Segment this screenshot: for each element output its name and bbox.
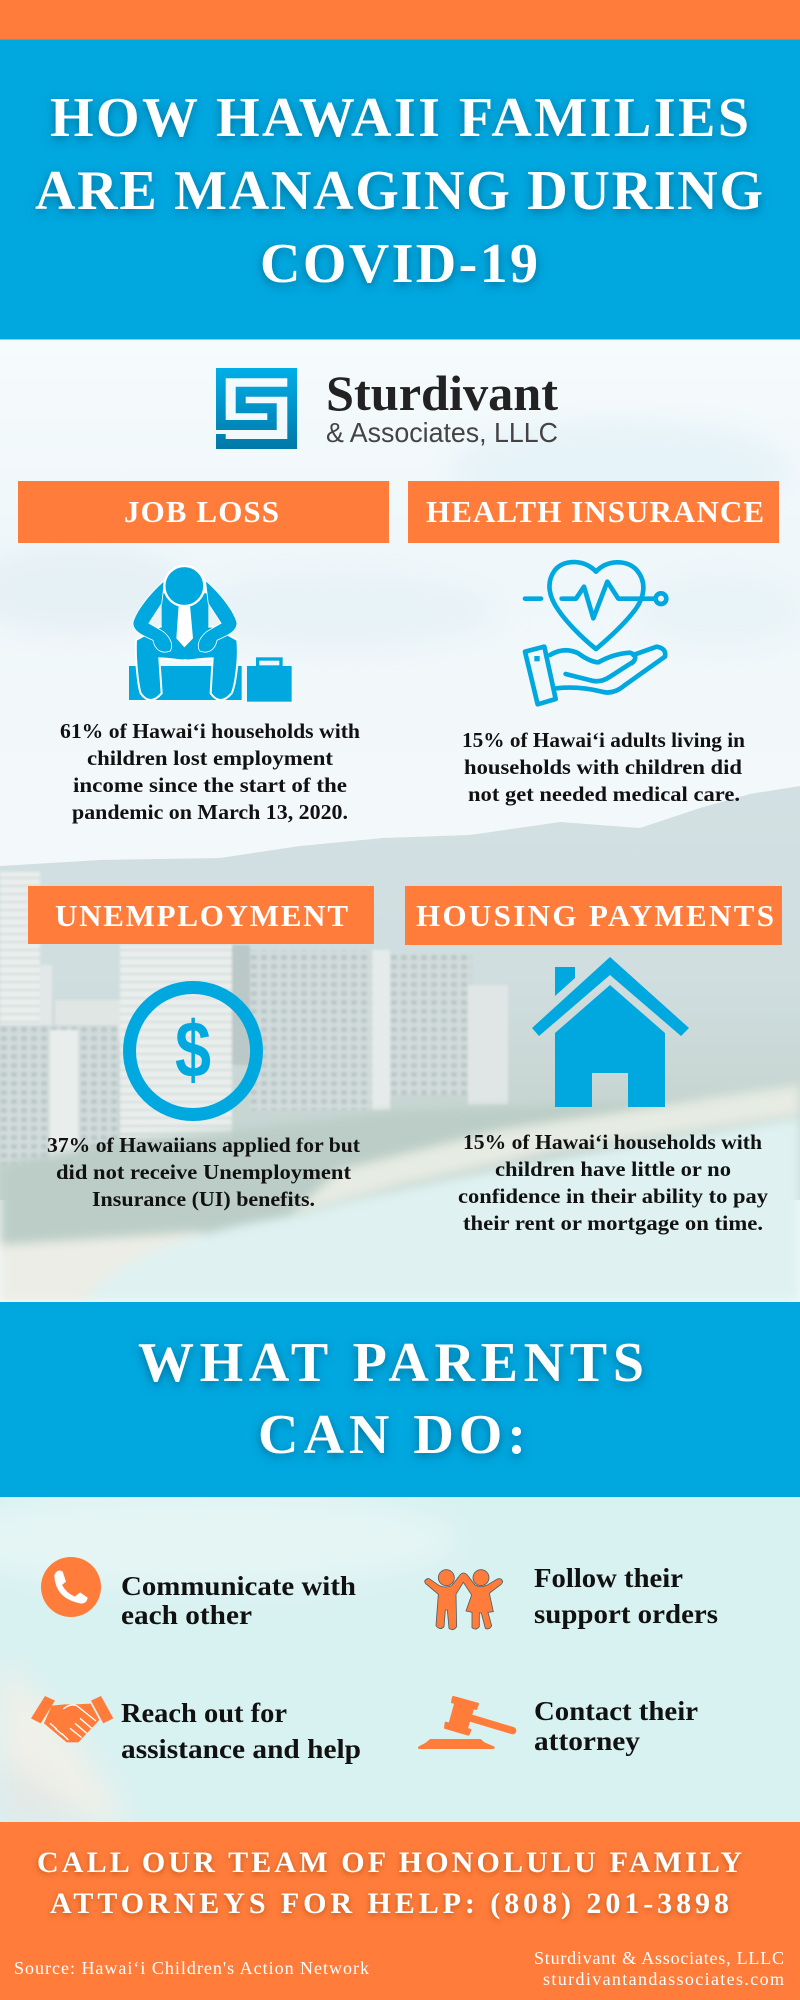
logo wordmark bbox=[326, 365, 558, 448]
title bbox=[35, 87, 763, 295]
logo bbox=[216, 365, 558, 449]
text: housing stat bbox=[458, 1130, 768, 1235]
text: communicate: Communicate with bbox=[121, 1570, 356, 1601]
text: housing stat: children have little or no bbox=[495, 1157, 731, 1181]
logo wordmark: Sturdivant bbox=[326, 365, 558, 421]
logo wordmark: & Associates, LLLC bbox=[326, 417, 558, 448]
top orange bar bbox=[0, 0, 800, 40]
text: job loss stat bbox=[60, 719, 360, 824]
panel: unemployment bbox=[28, 886, 374, 1211]
heading: unemployment: UNEMPLOYMENT bbox=[55, 898, 348, 933]
text: job loss stat: income since the start of the bbox=[73, 773, 347, 797]
item: reach out bbox=[31, 1696, 361, 1764]
heading: unemployment bbox=[28, 886, 374, 944]
text: support orders: Follow their bbox=[534, 1562, 683, 1593]
item: communicate bbox=[41, 1557, 356, 1630]
text: firm credit bbox=[534, 1948, 784, 1989]
heading: what parents can do: CAN DO: bbox=[258, 1404, 526, 1466]
heading: health insurance bbox=[408, 481, 779, 543]
text: support orders: support orders bbox=[534, 1598, 718, 1629]
heading: job loss bbox=[18, 481, 389, 543]
icon: handshake bbox=[31, 1696, 113, 1742]
text: reach out: Reach out for bbox=[121, 1697, 287, 1728]
logo mark bbox=[216, 368, 297, 449]
icon: dollar coin: $ bbox=[175, 1005, 211, 1094]
text: support orders bbox=[534, 1562, 718, 1629]
icon: phone bbox=[41, 1557, 101, 1617]
text: source: Source: Hawaiʻi Children's Action Network bbox=[14, 1958, 369, 1978]
icon: house bbox=[532, 957, 689, 1107]
panel: what parents can do heading bbox=[0, 1302, 800, 1497]
title panel bbox=[0, 40, 800, 340]
text: contact attorney: Contact their bbox=[534, 1695, 698, 1726]
text: job loss stat: 61% of Hawaiʻi households with bbox=[60, 719, 360, 743]
text: call to action bbox=[37, 1846, 742, 1920]
text: reach out: assistance and help bbox=[121, 1733, 361, 1764]
text: housing stat: their rent or mortgage on time. bbox=[463, 1211, 763, 1235]
heading: what parents can do: WHAT PARENTS bbox=[138, 1332, 644, 1394]
text: job loss stat: pandemic on March 13, 2020. bbox=[72, 800, 348, 824]
text: communicate: each other bbox=[121, 1599, 252, 1630]
icon: gavel bbox=[419, 1697, 513, 1748]
panel: housing payments bbox=[405, 886, 782, 1235]
item: contact attorney bbox=[419, 1695, 698, 1756]
heading: health insurance: HEALTH INSURANCE bbox=[426, 494, 764, 529]
text: call to action: CALL OUR TEAM OF HONOLULU FAMILY bbox=[37, 1846, 742, 1879]
background: Honolulu photo bbox=[0, 340, 800, 1822]
background: shoreline and water bbox=[0, 1085, 800, 1302]
item: support orders bbox=[425, 1562, 718, 1630]
text: call to action: ATTORNEYS FOR HELP: (808) 201-3898 bbox=[50, 1887, 729, 1920]
text: unemployment stat bbox=[47, 1133, 361, 1211]
heading: what parents can do bbox=[138, 1332, 644, 1466]
text: reach out bbox=[121, 1697, 361, 1764]
text: health insurance stat: not get needed medical care. bbox=[468, 782, 740, 806]
text: contact attorney: attorney bbox=[534, 1725, 640, 1756]
text: contact attorney bbox=[534, 1695, 698, 1756]
panel: actions list bbox=[31, 1557, 718, 1764]
text: health insurance stat bbox=[462, 728, 745, 806]
icon: two children bbox=[425, 1570, 503, 1630]
heading: housing payments bbox=[405, 886, 782, 945]
panel: footer call to action bbox=[0, 1822, 800, 2000]
icon: dollar coin bbox=[130, 988, 256, 1114]
icon: heart on open hand bbox=[525, 562, 666, 704]
text: housing stat: confidence in their ability to pay bbox=[458, 1184, 768, 1208]
text: unemployment stat: Insurance (UI) benefits. bbox=[92, 1187, 315, 1211]
panel: job loss bbox=[18, 481, 389, 824]
text: communicate bbox=[121, 1570, 356, 1630]
text: firm credit: Sturdivant & Associates, LLLC bbox=[534, 1948, 784, 1968]
text: health insurance stat: 15% of Hawaiʻi adults living in bbox=[462, 728, 745, 752]
text: job loss stat: children lost employment bbox=[87, 746, 334, 770]
text: unemployment stat: 37% of Hawaiians applied for but bbox=[47, 1133, 361, 1157]
background: hotel towers bbox=[0, 872, 508, 1165]
heading: job loss: JOB LOSS bbox=[124, 494, 279, 529]
text: housing stat: 15% of Hawaiʻi households with bbox=[463, 1130, 762, 1154]
icon: dejected worker with briefcase bbox=[129, 566, 292, 702]
text: unemployment stat: did not receive Unemployment bbox=[56, 1160, 352, 1184]
title: COVID-19 bbox=[260, 233, 538, 295]
text: firm credit: sturdivantandassociates.com bbox=[543, 1969, 784, 1989]
heading: housing payments: HOUSING PAYMENTS bbox=[416, 898, 774, 933]
title: ARE MANAGING DURING bbox=[35, 160, 763, 222]
panel: health insurance bbox=[408, 481, 779, 806]
title: HOW HAWAII FAMILIES bbox=[50, 87, 749, 149]
text: health insurance stat: households with children did bbox=[464, 755, 742, 779]
